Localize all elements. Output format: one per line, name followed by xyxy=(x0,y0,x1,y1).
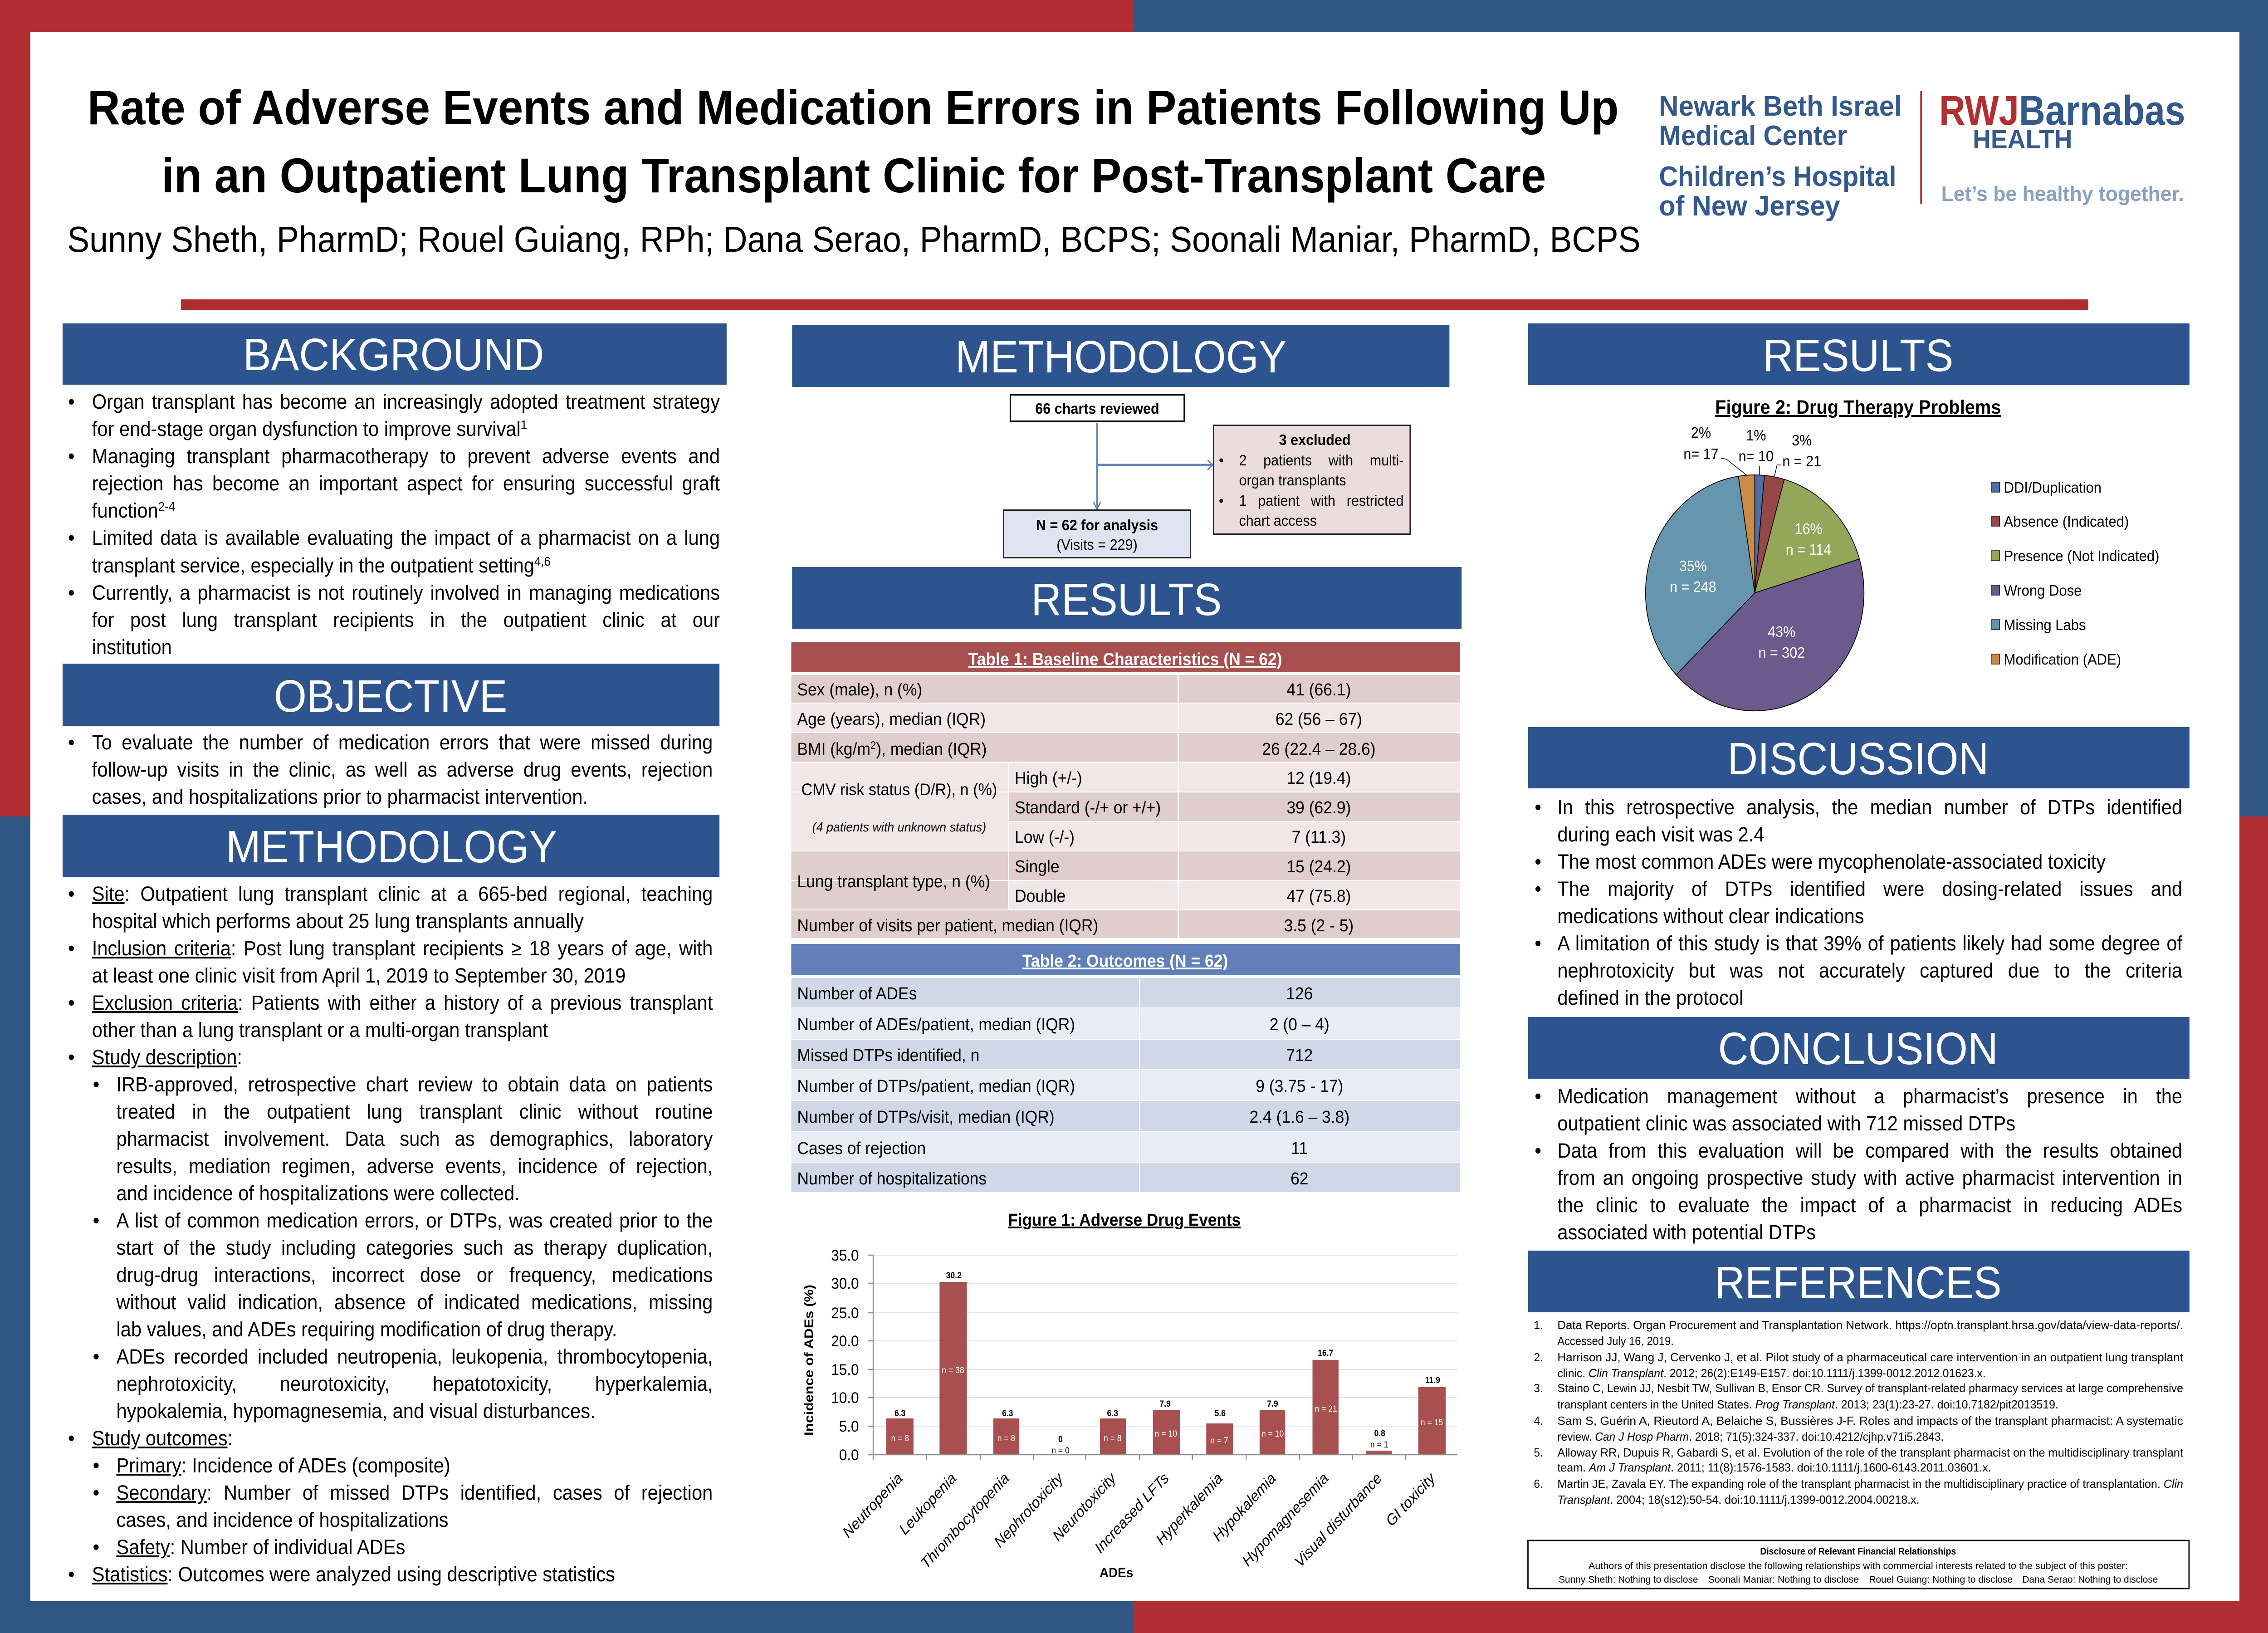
pie legend: Presence (Not Indicated) xyxy=(2004,548,2160,564)
bar chart: adverse drug events: n = 21 xyxy=(1315,1403,1337,1413)
heading: discussion xyxy=(1528,727,2190,788)
disclosure box: Disclosure of Relevant Financial Relationships xyxy=(1760,1546,1956,1557)
pie chart: drug therapy problems: n= 17 xyxy=(1683,445,1719,462)
table 2: outcomes: Missed DTPs identified, n xyxy=(797,1046,979,1065)
bar chart: adverse drug events: Leukopenia xyxy=(896,1469,959,1538)
text block: methodology: • xyxy=(93,1073,99,1096)
table 1: baseline characteristics: 41 (66.1) xyxy=(1286,680,1351,699)
bar chart: adverse drug events: n = 1 xyxy=(1370,1439,1388,1449)
flowchart: excluded: 1 patient with restricted xyxy=(1239,492,1403,509)
text block: methodology: Site: Outpatient lung transplant clinic at a 665-bed regional, teaching xyxy=(92,882,713,905)
bar chart: adverse drug events: n = 7 xyxy=(1210,1435,1228,1445)
table 2: outcomes: Table 2: Outcomes (N = 62) xyxy=(1022,951,1228,970)
text block: objective: cases, and hospitalizations prior to pharmacist intervention. xyxy=(92,785,588,808)
text block: methodology: Study description: xyxy=(92,1046,242,1069)
text: • xyxy=(68,390,75,413)
reference list xyxy=(1534,1319,2183,1506)
text: • xyxy=(1535,877,1541,900)
heading: methodology left: METHODOLOGY xyxy=(226,822,557,872)
pie chart: drug therapy problems: 3% xyxy=(1792,432,1812,449)
table 2: outcomes: Cases of rejection xyxy=(797,1139,926,1158)
logo: RWJBarnabas Health: HEALTH xyxy=(1973,124,2072,154)
reference list: review. Can J Hosp Pharm. 2018; 71(5):324-337. doi:10.4212/cjhp.v71i5.2843. xyxy=(1557,1430,1944,1443)
table 1: baseline characteristics: High (+/-) xyxy=(1015,768,1082,787)
reference list: Data Reports. Organ Procurement and Transplantation Network. https://optn.transplant.hrsa.gov/data/view-data-reports/. xyxy=(1557,1319,2183,1332)
reference list: Sam S, Guérin A, Rieutord A, Belaiche S, Bussières J-F. Roles and impacts of the transplant pharmacist: A systematic xyxy=(1557,1414,2183,1428)
heading: conclusion: CONCLUSION xyxy=(1718,1024,1998,1074)
reference list: 6. xyxy=(1534,1477,1543,1491)
text block: methodology: ADEs recorded included neutropenia, leukopenia, thrombocytopenia, xyxy=(116,1345,713,1368)
table 2: outcomes xyxy=(791,944,1460,1192)
disclosure box xyxy=(1528,1540,2189,1589)
text: • xyxy=(1535,1139,1541,1162)
text block: background bullets: function2-4 xyxy=(92,499,175,522)
table 2: outcomes: 2.4 (1.6 – 3.8) xyxy=(1249,1107,1349,1126)
title: in an Outpatient Lung Transplant Clinic for Post-Transplant Care xyxy=(161,148,1546,203)
disclosure box: Rouel Guiang: Nothing to disclose xyxy=(1869,1574,2013,1585)
table 1: baseline characteristics: ), median (IQR) xyxy=(876,739,987,758)
text block: methodology: Statistics: Outcomes were analyzed using descriptive statistics xyxy=(92,1563,615,1586)
text block: methodology: Primary: Incidence of ADEs (composite) xyxy=(116,1454,450,1477)
bar chart: adverse drug events: n = 8 xyxy=(891,1433,909,1443)
flowchart: excluded: • xyxy=(1219,452,1224,468)
table 1: baseline characteristics: CMV risk status (D/R), n (%) xyxy=(801,780,997,799)
disclosure box: Dana Serao: Nothing to disclose xyxy=(2022,1574,2158,1585)
bar chart: adverse drug events: 16.7 xyxy=(1318,1348,1333,1358)
bar chart: adverse drug events: ADEs xyxy=(1100,1565,1133,1580)
text block: background bullets: Currently, a pharmacist is not routinely involved in managing medications xyxy=(92,581,720,604)
text: • xyxy=(68,882,75,905)
table 1: baseline characteristics: Age (years), median (IQR) xyxy=(797,709,986,728)
text block: methodology: other than a lung transplant or a multi-organ transplant xyxy=(92,1018,548,1041)
text: • xyxy=(1535,796,1541,819)
text block: methodology: lab values, and ADEs requiring modification of drug therapy. xyxy=(116,1318,617,1341)
bar chart: adverse drug events: 5.0 xyxy=(839,1418,859,1435)
heading: results right: RESULTS xyxy=(1763,331,1953,381)
heading: background: BACKGROUND xyxy=(243,330,544,380)
table 1: baseline characteristics: Double xyxy=(1015,886,1066,905)
reference list: Staino C, Lewin JJ, Nesbit TW, Sullivan B, Ensor CR. Survey of transplant-related pharmacy services at large comprehensive xyxy=(1557,1382,2183,1395)
table 1: baseline characteristics: BMI (kg/m xyxy=(797,739,870,758)
text block: methodology: • xyxy=(93,1481,99,1504)
text block: methodology: results, mediation regimen, adverse events, incidence of rejection, xyxy=(116,1154,713,1178)
table 2: outcomes: Number of DTPs/patient, median (IQR) xyxy=(797,1076,1075,1095)
text block: methodology: pharmacist involvement. Data such as demographics, laboratory xyxy=(116,1127,713,1150)
text: • xyxy=(68,526,75,549)
text block: conclusion xyxy=(1557,1083,2182,1246)
table 1: baseline characteristics: 47 (75.8) xyxy=(1286,886,1351,905)
authors: Sunny Sheth, PharmD; Rouel Guiang, RPh; Dana Serao, PharmD, BCPS; Soonali Maniar, PharmD, BCPS xyxy=(67,220,1641,260)
pie legend xyxy=(1991,479,2160,668)
heading: references: REFERENCES xyxy=(1715,1258,2002,1308)
reference list: 1. xyxy=(1534,1319,1543,1332)
flowchart: final analysis: N = 62 for analysis xyxy=(1036,517,1158,533)
pie chart: drug therapy problems: 2% xyxy=(1691,424,1711,441)
pie chart: drug therapy problems: 35% xyxy=(1679,557,1707,574)
reference list: clinic. Clin Transplant. 2012; 26(2):E149-E157. doi:10.1111/j.1399-0012.2012.01623.x. xyxy=(1557,1367,1986,1380)
text: • xyxy=(68,1046,75,1069)
title xyxy=(88,80,1618,203)
text block: methodology: nephrotoxicity, neurotoxicity, hepatotoxicity, hyperkalemia, xyxy=(116,1372,713,1395)
text block: discussion xyxy=(1557,794,2182,1012)
bar chart: adverse drug events: 11.9 xyxy=(1425,1375,1440,1385)
bar chart: adverse drug events: Increased LFTs xyxy=(1091,1469,1172,1556)
table 1: baseline characteristics: Low (-/-) xyxy=(1015,827,1075,846)
bar chart: adverse drug events: Thrombocytopenia xyxy=(917,1469,1012,1572)
pie chart: drug therapy problems: 16% xyxy=(1794,520,1823,537)
flowchart: excluded: 3 excluded xyxy=(1279,431,1351,448)
text block: background bullets: rejection has become an important aspect for ensuring successful graft xyxy=(92,472,720,495)
pie legend: DDI/Duplication xyxy=(2004,479,2102,496)
flowchart: excluded: chart access xyxy=(1239,512,1317,529)
text block: methodology: IRB-approved, retrospective chart review to obtain data on patients xyxy=(116,1073,713,1096)
heading: background xyxy=(63,323,727,385)
bar chart: adverse drug events: Visual disturbance xyxy=(1291,1469,1385,1570)
text: • xyxy=(1535,1085,1541,1108)
bar chart: adverse drug events: 7.9 xyxy=(1267,1398,1278,1408)
text block: discussion: medications without clear indications xyxy=(1557,905,1864,928)
text block: objective xyxy=(92,729,713,811)
bar chart: adverse drug events xyxy=(802,1247,1457,1580)
bar chart: adverse drug events: 0.8 xyxy=(1374,1428,1385,1438)
text block: background bullets: institution xyxy=(92,636,172,659)
table 1: baseline characteristics: 15 (24.2) xyxy=(1286,857,1351,876)
text block: background bullets xyxy=(92,388,720,661)
text: • xyxy=(68,937,75,960)
pie chart: drug therapy problems: 43% xyxy=(1768,623,1795,640)
bar chart: adverse drug events: Neurotoxicity xyxy=(1049,1468,1120,1545)
heading: results center xyxy=(792,567,1461,629)
text block: conclusion: the clinic to evaluate the impact of a pharmacist in reducing ADEs xyxy=(1557,1193,2182,1217)
text: • xyxy=(68,991,75,1014)
table 2: outcomes: 126 xyxy=(1286,984,1313,1003)
heading: results center: RESULTS xyxy=(1031,575,1222,625)
table 2: outcomes: 11 xyxy=(1291,1139,1308,1158)
pie chart: drug therapy problems: 1% xyxy=(1746,427,1766,444)
text block: methodology: drug-drug interactions, incorrect dose or frequency, medications xyxy=(116,1263,713,1286)
heading: methodology center xyxy=(792,325,1449,387)
text block: methodology: Secondary: Number of missed DTPs identified, cases of rejection xyxy=(116,1481,713,1504)
text block: background bullets: Managing transplant pharmacotherapy to prevent adverse events and xyxy=(92,445,720,468)
heading: references xyxy=(1528,1251,2190,1312)
reference list: 3. xyxy=(1534,1382,1543,1395)
bar chart: adverse drug events: 20.0 xyxy=(831,1332,859,1349)
pie chart: drug therapy problems: n = 114 xyxy=(1786,541,1831,558)
text: • xyxy=(1535,850,1541,873)
pie chart: drug therapy problems xyxy=(1646,424,1864,711)
bar chart: adverse drug events: Hyperkalemia xyxy=(1153,1469,1226,1548)
bar chart: adverse drug events: n = 15 xyxy=(1421,1417,1443,1427)
bar chart: adverse drug events: n = 8 xyxy=(997,1433,1015,1443)
heading: objective: OBJECTIVE xyxy=(274,671,507,722)
table 2: outcomes: 2 (0 – 4) xyxy=(1270,1015,1330,1034)
bar chart: adverse drug events: Incidence of ADEs (%) xyxy=(802,1285,816,1436)
logo: Newark Beth Israel and Children's Hospital xyxy=(1659,90,1902,221)
table 1: baseline characteristics: 39 (62.9) xyxy=(1286,798,1351,817)
logo: Newark Beth Israel and Children's Hospital: of New Jersey xyxy=(1659,190,1840,221)
text block: methodology: • xyxy=(93,1209,99,1232)
heading: conclusion xyxy=(1528,1017,2190,1079)
title: Rate of Adverse Events and Medication Errors in Patients Following Up xyxy=(88,80,1618,135)
pie legend: Absence (Indicated) xyxy=(2004,513,2129,530)
reference list: 2. xyxy=(1534,1351,1543,1364)
logo: RWJBarnabas Health: RWJ xyxy=(1939,87,2019,134)
bar chart: adverse drug events: 6.3 xyxy=(1002,1408,1013,1418)
reference list: Transplant. 2004; 18(s12):50-54. doi:10.1111/j.1399-0012.2004.00218.x. xyxy=(1557,1493,1919,1506)
table 1: baseline characteristics: 12 (19.4) xyxy=(1286,768,1351,787)
text block: objective: follow-up visits in the clinic, as well as adverse drug events, rejection xyxy=(92,758,713,781)
text: • xyxy=(68,1563,75,1586)
text block: objective: To evaluate the number of medication errors that were missed during xyxy=(92,731,713,754)
table 2: outcomes: Number of ADEs/patient, median (IQR) xyxy=(797,1015,1075,1034)
bar chart: adverse drug events: 35.0 xyxy=(831,1247,859,1264)
bar chart: adverse drug events: n = 38 xyxy=(942,1365,964,1375)
figure 1 title: Figure 1: Adverse Drug Events xyxy=(1008,1210,1241,1229)
bar chart: adverse drug events: GI toxicity xyxy=(1383,1468,1439,1530)
bar chart: adverse drug events: 7.9 xyxy=(1159,1398,1171,1408)
logo: Newark Beth Israel and Children's Hospital: Newark Beth Israel xyxy=(1659,90,1902,122)
flowchart: excluded xyxy=(1213,425,1411,535)
text block: discussion: A limitation of this study is that 39% of patients likely had some degree of xyxy=(1557,932,2182,955)
text block: methodology: treated in the outpatient lung transplant clinic without routine xyxy=(116,1100,713,1123)
text block: discussion: defined in the protocol xyxy=(1557,986,1743,1009)
bar chart: adverse drug events: n = 8 xyxy=(1104,1433,1122,1443)
bar chart: adverse drug events: 30.0 xyxy=(831,1275,859,1292)
heading: methodology left xyxy=(63,815,719,877)
flowchart arrows xyxy=(1093,423,1213,509)
text block: methodology: Study outcomes: xyxy=(92,1427,233,1450)
table 2: outcomes: Number of hospitalizations xyxy=(797,1169,987,1188)
table 1: baseline characteristics: 7 (11.3) xyxy=(1292,827,1346,846)
flowchart: excluded: 2 patients with multi- xyxy=(1239,452,1403,468)
flowchart: charts reviewed xyxy=(1010,394,1185,422)
logo: RWJBarnabas Health: Let’s be healthy together. xyxy=(1941,183,2184,205)
text block: discussion: The majority of DTPs identified were dosing-related issues and xyxy=(1557,877,2182,900)
bar chart: adverse drug events: n = 10 xyxy=(1155,1428,1177,1438)
text block: methodology: Exclusion criteria: Patients with either a history of a previous transplant xyxy=(92,991,713,1014)
text block: discussion: In this retrospective analysis, the median number of DTPs identified xyxy=(1557,796,2182,819)
table 1: baseline characteristics: 2 xyxy=(870,739,876,751)
text block: background bullets: Organ transplant has become an increasingly adopted treatment strategy xyxy=(92,390,720,413)
text block: background bullets: for end-stage organ dysfunction to improve survival1 xyxy=(92,417,527,440)
bar chart: adverse drug events: 15.0 xyxy=(831,1361,859,1378)
reference list: 4. xyxy=(1534,1414,1543,1428)
heading: discussion: DISCUSSION xyxy=(1727,734,1989,784)
flowchart: final analysis: (Visits = 229) xyxy=(1056,536,1138,553)
bar chart: adverse drug events: 10.0 xyxy=(831,1389,859,1406)
logo: RWJBarnabas Health: Barnabas xyxy=(2019,87,2185,134)
reference list: Alloway RR, Dupuis R, Gabardi S, et al. Evolution of the role of the transplant pharmacist on the multidisciplinary transplant xyxy=(1557,1446,2183,1459)
table 2: outcomes: Number of ADEs xyxy=(797,984,917,1003)
text block: methodology: Inclusion criteria: Post lung transplant recipients ≥ 18 years of age, with xyxy=(92,937,713,960)
text block: background bullets: Limited data is available evaluating the impact of a pharmacist on a lung xyxy=(92,526,720,549)
text block: methodology: and incidence of hospitalizations were collected. xyxy=(116,1182,520,1205)
pie chart: drug therapy problems: n = 248 xyxy=(1670,578,1716,595)
table 2: outcomes: 9 (3.75 - 17) xyxy=(1256,1076,1343,1095)
pie legend: Missing Labs xyxy=(2004,616,2086,633)
table 1: baseline characteristics: 3.5 (2 - 5) xyxy=(1284,916,1354,935)
bar chart: adverse drug events: Hypokalemia xyxy=(1209,1469,1279,1545)
text block: methodology: without valid indication, absence of indicated medications, missing xyxy=(116,1291,713,1314)
bar chart: adverse drug events: Nephrotoxicity xyxy=(991,1468,1067,1550)
text block: methodology xyxy=(92,880,713,1588)
text block: methodology: A list of common medication errors, or DTPs, was created prior to the xyxy=(116,1209,713,1232)
table 1: baseline characteristics: 26 (22.4 – 28.6) xyxy=(1262,739,1376,758)
text block: discussion: during each visit was 2.4 xyxy=(1557,823,1765,846)
logo: Newark Beth Israel and Children's Hospital: Medical Center xyxy=(1659,120,1847,151)
reference list: Martin JE, Zavala EY. The expanding role of the transplant pharmacist in the multidisciplinary practice of transplantation. Clin xyxy=(1557,1477,2183,1491)
pie chart: drug therapy problems: n = 21 xyxy=(1782,453,1821,469)
table 1: baseline characteristics: Standard (-/+ or +/+) xyxy=(1015,798,1161,817)
text block: methodology: hypokalemia, hypomagnesemia, and visual disturbances. xyxy=(116,1399,596,1423)
disclosure box: Sunny Sheth: Nothing to disclose xyxy=(1559,1574,1698,1585)
bar chart: adverse drug events: Hypomagnesemia xyxy=(1239,1469,1331,1569)
text: • xyxy=(68,581,75,604)
pie legend: Wrong Dose xyxy=(2004,582,2082,599)
table 2: outcomes: 712 xyxy=(1286,1046,1313,1065)
bar chart: adverse drug events: 5.6 xyxy=(1215,1408,1226,1418)
text: • xyxy=(1535,932,1541,955)
table 1: baseline characteristics xyxy=(791,642,1460,938)
bar chart: adverse drug events: 25.0 xyxy=(831,1304,859,1321)
heading: methodology center: METHODOLOGY xyxy=(955,332,1287,382)
bar chart: adverse drug events: n = 0 xyxy=(1051,1445,1070,1455)
table 1: baseline characteristics: Table 1: Baseline Characteristics (N = 62) xyxy=(968,650,1282,669)
text block: conclusion: Data from this evaluation will be compared with the results obtained xyxy=(1557,1139,2182,1162)
figure 2 title: Figure 2: Drug Therapy Problems xyxy=(1715,396,2001,418)
disclosure box: Authors of this presentation disclose the following relationships with commercial interests related to the subject of this poster: xyxy=(1589,1561,2128,1571)
logo: RWJBarnabas Health xyxy=(1920,87,2185,205)
text block: discussion: The most common ADEs were mycophenolate-associated toxicity xyxy=(1557,850,2106,873)
logo: Newark Beth Israel and Children's Hospital: Children’s Hospital xyxy=(1659,161,1897,192)
text: • xyxy=(68,731,75,754)
text block: background bullets: for post lung transplant recipients in the outpatient clinic at our xyxy=(92,608,720,631)
text block: methodology: start of the study including categories such as therapy duplication, xyxy=(116,1236,713,1259)
pie chart: drug therapy problems: n= 10 xyxy=(1739,448,1774,464)
text block: conclusion: outpatient clinic was associated with 712 missed DTPs xyxy=(1557,1112,2015,1135)
table 1: baseline characteristics: (4 patients with unknown status) xyxy=(812,820,986,834)
table 1: baseline characteristics: 62 (56 – 67) xyxy=(1276,709,1362,728)
text block: discussion: nephrotoxicity but was not accurately captured due to the criteria xyxy=(1557,959,2182,982)
bar chart: adverse drug events: 0 xyxy=(1058,1434,1063,1444)
text block: methodology: • xyxy=(93,1345,99,1368)
text: • xyxy=(68,1427,75,1450)
reference list: team. Am J Transplant . 2011; 11(8):1576-1583. doi:10.1111/j.1600-6143.2011.03601.x. xyxy=(1557,1461,1991,1474)
text: • xyxy=(68,445,75,468)
bar chart: adverse drug events: 0.0 xyxy=(839,1446,859,1463)
table 1: baseline characteristics: Number of visits per patient, median (IQR) xyxy=(797,916,1098,935)
reference list: transplant centers in the United States. Prog Transplant. 2013; 23(1):23-27. doi:10.7182/pit2013519. xyxy=(1557,1398,2058,1411)
bar chart: adverse drug events: 6.3 xyxy=(1107,1408,1118,1418)
text block: methodology: • xyxy=(93,1454,99,1477)
bar chart: adverse drug events: 30.2 xyxy=(946,1270,962,1280)
table 2: outcomes: Number of DTPs/visit, median (IQR) xyxy=(797,1107,1055,1126)
flowchart: charts reviewed: 66 charts reviewed xyxy=(1035,400,1159,417)
text block: methodology: cases, and incidence of hospitalizations xyxy=(116,1508,448,1531)
table 1: baseline characteristics: Sex (male), n (%) xyxy=(797,680,922,699)
table 1: baseline characteristics: Single xyxy=(1015,857,1060,876)
reference list: Accessed July 16, 2019. xyxy=(1557,1335,1674,1348)
heading: results right xyxy=(1528,323,2190,385)
text block: conclusion: Medication management without a pharmacist’s presence in the xyxy=(1557,1085,2182,1108)
table 2: outcomes: 62 xyxy=(1290,1169,1309,1188)
bar chart: adverse drug events: Neutropenia xyxy=(839,1469,905,1541)
table 1: baseline characteristics: Lung transplant type, n (%) xyxy=(797,872,990,891)
flowchart: final analysis xyxy=(1003,509,1191,558)
bar chart: adverse drug events: 6.3 xyxy=(894,1408,905,1418)
text block: methodology: Safety: Number of individual ADEs xyxy=(116,1535,405,1559)
text block: conclusion: from an ongoing prospective study with active pharmacist intervention in xyxy=(1557,1166,2182,1189)
text block: conclusion: associated with potential DTPs xyxy=(1557,1221,1816,1244)
flowchart: excluded: • xyxy=(1219,492,1224,509)
flowchart: excluded: organ transplants xyxy=(1239,472,1346,489)
text block: methodology: • xyxy=(93,1535,99,1559)
text block: methodology: hospital which performs about 25 lung transplants annually xyxy=(92,909,584,933)
pie legend: Modification (ADE) xyxy=(2004,651,2121,668)
disclosure box: Soonali Maniar: Nothing to disclose xyxy=(1708,1574,1859,1585)
text block: background bullets: transplant service, especially in the outpatient setting4,6 xyxy=(92,554,551,577)
reference list: 5. xyxy=(1534,1446,1543,1459)
bar chart: adverse drug events: n = 10 xyxy=(1261,1428,1284,1438)
pie chart: drug therapy problems: n = 302 xyxy=(1758,644,1805,661)
reference list: Harrison JJ, Wang J, Cervenko J, et al. Pilot study of a pharmaceutical care intervention in an outpatient lung transplant xyxy=(1557,1351,2183,1364)
text block: methodology: at least one clinic visit from April 1, 2019 to September 30, 2019 xyxy=(92,964,626,987)
heading: objective xyxy=(63,664,719,726)
